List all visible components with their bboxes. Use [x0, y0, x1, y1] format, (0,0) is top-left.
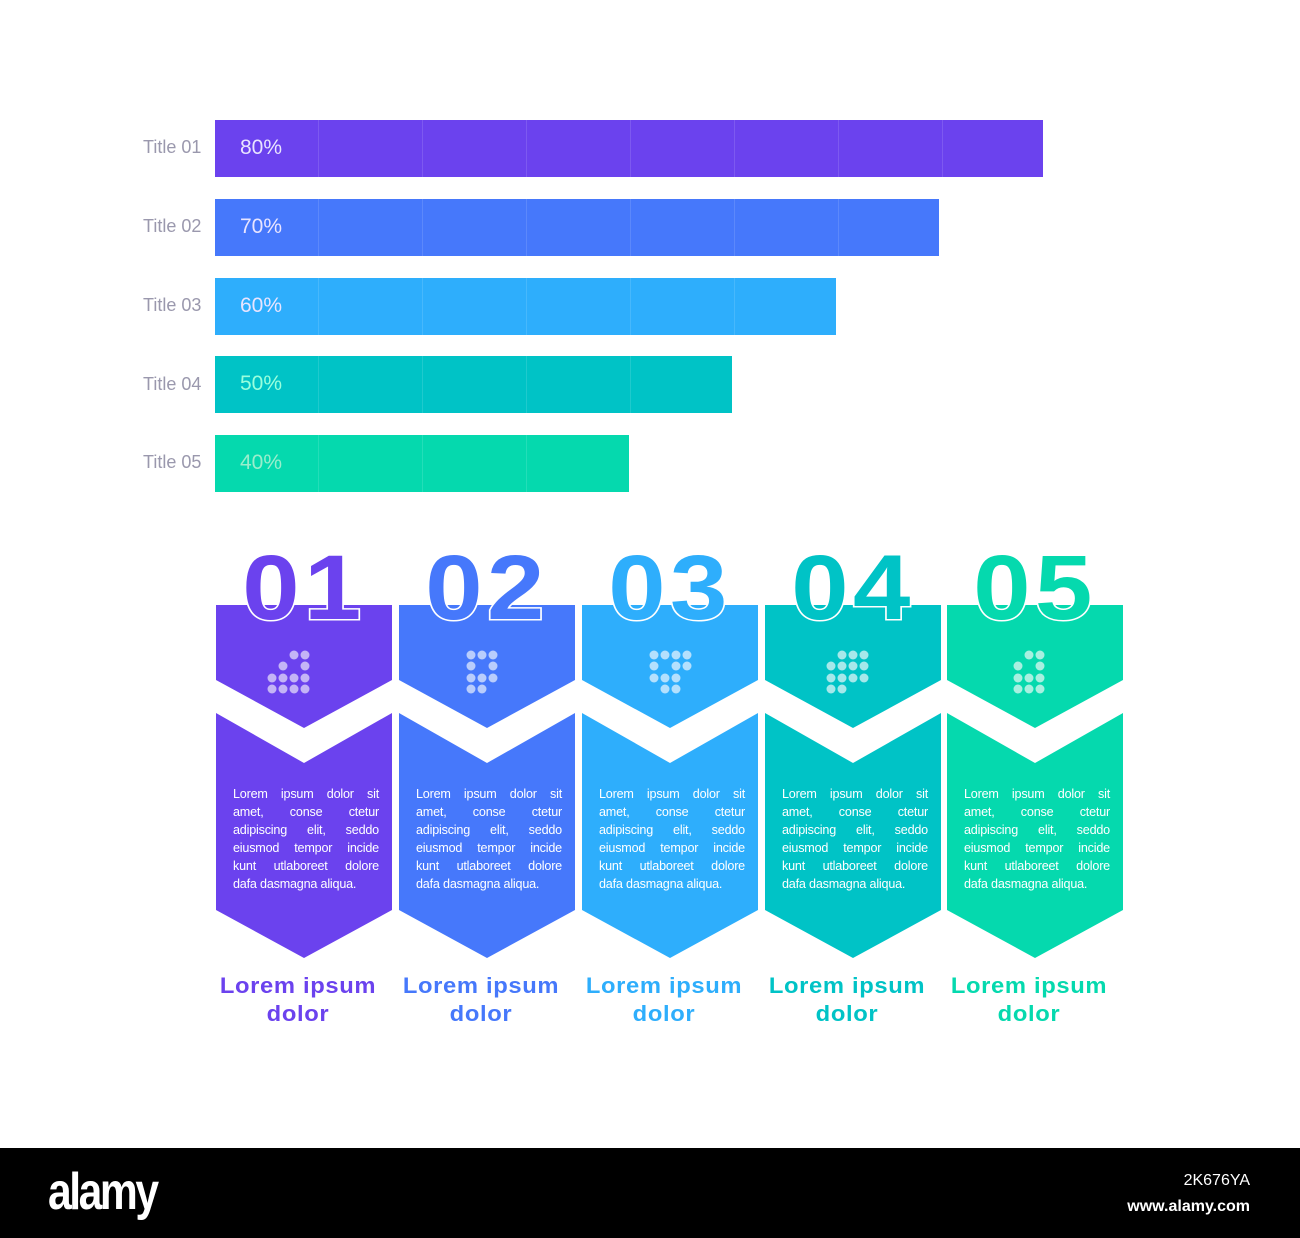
number 03: 03	[608, 537, 732, 639]
text 01	[233, 787, 380, 891]
text 05: kunt utlaboreet dolore	[964, 859, 1110, 873]
number 04: 04	[791, 537, 915, 639]
text 01: kunt utlaboreet dolore	[233, 859, 379, 873]
bar 02: 70%	[240, 215, 282, 238]
heading 01	[220, 973, 376, 1026]
text 03: Lorem ipsum dolor sit	[599, 787, 745, 801]
text 01: adipiscing elit, seddo	[233, 823, 379, 837]
text 02: dafa dasmagna aliqua.	[416, 877, 539, 891]
heading 03: dolor	[633, 1001, 695, 1026]
text 05	[964, 787, 1110, 891]
footer logo: alamy	[48, 1163, 157, 1221]
number 05: 05	[973, 537, 1097, 639]
label: Title 04: Title 04	[143, 374, 201, 394]
bar 04	[215, 356, 732, 413]
column 01	[216, 537, 392, 1026]
text 01: eiusmod tempor incide	[233, 841, 379, 855]
bar 03	[215, 278, 836, 335]
bar 04: 50%	[240, 372, 282, 395]
bar chart	[140, 118, 1050, 494]
bar 05: 40%	[240, 451, 282, 474]
heading 02	[403, 973, 559, 1026]
text 02: kunt utlaboreet dolore	[416, 859, 562, 873]
bar 05	[215, 435, 629, 492]
label: Title 02: Title 02	[143, 216, 201, 236]
text 03: adipiscing elit, seddo	[599, 823, 745, 837]
text 03: kunt utlaboreet dolore	[599, 859, 745, 873]
heading 03: Lorem ipsum	[586, 973, 742, 998]
heading 03	[586, 973, 742, 1026]
heading 02: dolor	[450, 1001, 512, 1026]
heading 04: dolor	[816, 1001, 878, 1026]
text 05: Lorem ipsum dolor sit	[964, 787, 1110, 801]
heading 05	[951, 973, 1107, 1026]
heading 04	[769, 973, 925, 1026]
text 02	[416, 787, 562, 891]
text 02: amet, conse ctetur	[416, 805, 562, 819]
text 01: amet, conse ctetur	[233, 805, 379, 819]
text 04: amet, conse ctetur	[782, 805, 928, 819]
column 04	[765, 537, 941, 1026]
label: Title 01: Title 01	[143, 137, 201, 157]
text 05: eiusmod tempor incide	[964, 841, 1110, 855]
text 04: adipiscing elit, seddo	[782, 823, 928, 837]
footer id text	[1127, 1172, 1250, 1215]
heading 04: Lorem ipsum	[769, 973, 925, 998]
text 02: adipiscing elit, seddo	[416, 823, 562, 837]
heading 05: dolor	[998, 1001, 1060, 1026]
column 05	[947, 537, 1123, 1026]
column 03	[582, 537, 758, 1026]
footer id text: www.alamy.com	[1127, 1198, 1250, 1215]
text 05: adipiscing elit, seddo	[964, 823, 1110, 837]
bar 01	[215, 120, 1043, 177]
text 02: Lorem ipsum dolor sit	[416, 787, 562, 801]
text 04	[782, 787, 928, 891]
text 04: eiusmod tempor incide	[782, 841, 928, 855]
text 03	[599, 787, 746, 891]
number 02: 02	[425, 537, 549, 639]
text 01: dafa dasmagna aliqua.	[233, 877, 356, 891]
text 01: Lorem ipsum dolor sit	[233, 787, 379, 801]
bar 02	[215, 199, 939, 256]
bar 03: 60%	[240, 294, 282, 317]
heading 01: Lorem ipsum	[220, 973, 376, 998]
text 05: dafa dasmagna aliqua.	[964, 877, 1087, 891]
column 02	[399, 537, 575, 1026]
label: Title 03: Title 03	[143, 295, 201, 315]
text 03: amet, conse ctetur	[599, 805, 745, 819]
text 04: Lorem ipsum dolor sit	[782, 787, 928, 801]
number 01: 01	[242, 537, 366, 639]
text 04: kunt utlaboreet dolore	[782, 859, 928, 873]
footer id text: 2K676YA	[1184, 1172, 1250, 1189]
text 02: eiusmod tempor incide	[416, 841, 562, 855]
text 03: dafa dasmagna aliqua.	[599, 877, 722, 891]
text 05: amet, conse ctetur	[964, 805, 1110, 819]
footer bar	[0, 1148, 1300, 1238]
heading 01: dolor	[267, 1001, 329, 1026]
label: Title 05: Title 05	[143, 452, 201, 472]
text 04: dafa dasmagna aliqua.	[782, 877, 905, 891]
heading 05: Lorem ipsum	[951, 973, 1107, 998]
heading 02: Lorem ipsum	[403, 973, 559, 998]
bar 01: 80%	[240, 136, 282, 159]
text 03: eiusmod tempor incide	[599, 841, 745, 855]
